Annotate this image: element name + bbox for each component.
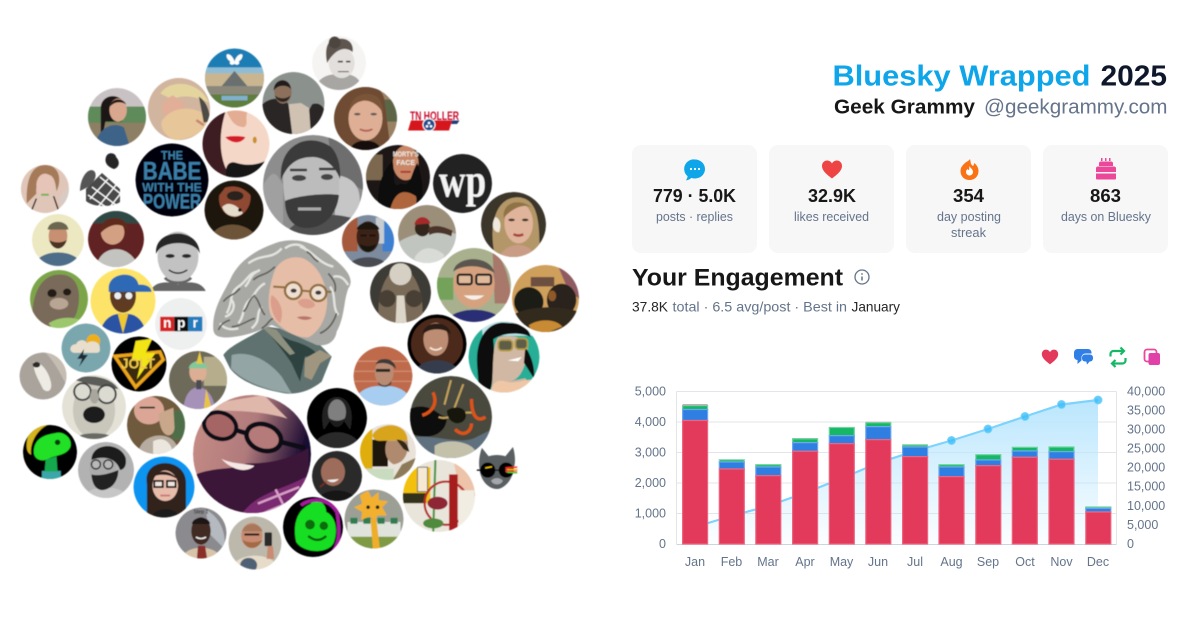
avatar: man in dark coat <box>262 72 324 134</box>
stat card: posts and replies <box>632 145 757 253</box>
month labels: Jan <box>685 555 705 569</box>
avatar: The Babe With The Power <box>136 144 208 216</box>
right axis labels: 0 <box>1127 537 1134 551</box>
bar: Feb <box>719 460 744 544</box>
avatar: Jolt diamond logo: JOLT <box>121 356 155 372</box>
avatar: NPR logo: p <box>177 316 185 331</box>
stat card: day posting streak: 354 <box>953 186 984 206</box>
portrait: watercolor main woman <box>213 240 351 394</box>
cumulative dots <box>911 396 1102 455</box>
avatar: cartoon man in blue cap on yellow <box>90 268 156 334</box>
month labels: Apr <box>795 555 815 569</box>
avatar: man in red cap <box>398 205 456 263</box>
avatar: bearded man in cap <box>32 214 84 266</box>
stat card: days on Bluesky: 863 <box>1090 186 1121 206</box>
avatar: owl <box>370 262 431 323</box>
bar: Dec <box>1086 507 1111 544</box>
avatar: man against brick wall <box>354 346 412 406</box>
user name and handle <box>834 96 1168 118</box>
legend icons <box>1042 348 1160 367</box>
right axis labels: 15,000 <box>1127 480 1165 494</box>
right axis labels: 30,000 <box>1127 422 1165 436</box>
avatar: woman with red lips <box>202 110 270 178</box>
icon: birthday cake <box>1096 158 1116 180</box>
avatar: Kronk cartoon with sunglasses <box>468 318 540 392</box>
user name and handle: @geekgrammy.com <box>984 96 1168 118</box>
heading: Your Engagement: Your Engagement <box>632 264 843 292</box>
left axis labels: 1,000 <box>635 506 666 520</box>
left axis labels <box>635 384 666 551</box>
logo: TN Holler: TN HOLLER <box>410 109 459 123</box>
avatar: Morty's Face woman: FACE <box>396 160 415 167</box>
stat card: likes received: likes received <box>794 210 869 224</box>
logo: TN Holler <box>408 109 460 131</box>
left axis labels: 3,000 <box>635 446 666 460</box>
avatar: sketched woman with updo <box>312 36 366 90</box>
avatar: woman in denim, landscape <box>88 88 146 146</box>
month labels: May <box>830 555 854 569</box>
avatar: large smiling man with glasses, purple tones <box>193 395 311 513</box>
avatar: NPR logo: n <box>163 316 171 331</box>
right axis labels: 35,000 <box>1127 404 1165 418</box>
avatar: man with cat <box>127 396 185 454</box>
stat card: posts and replies: posts · replies <box>656 210 733 224</box>
avatar: The Babe With The Power: THE <box>161 149 183 163</box>
avatar: screaming man sketch <box>62 375 126 439</box>
stat card: likes received: 32.9K <box>808 186 856 206</box>
chart: monthly engagement stacked bars and cumulative line <box>635 384 1165 569</box>
avatar: NPR logo: r <box>193 316 199 331</box>
right axis labels: 25,000 <box>1127 442 1165 456</box>
avatar: man taking mirror selfie <box>228 516 282 573</box>
month labels: Oct <box>1015 555 1035 569</box>
avatar: blonde woman with cat <box>148 78 210 140</box>
month labels: Feb <box>721 555 742 569</box>
legend: replies speech bubbles <box>1074 349 1093 364</box>
avatar: toddler <box>88 211 144 267</box>
month labels: Aug <box>940 555 963 569</box>
avatar: Morty's Face woman <box>366 145 430 209</box>
bar: Apr <box>793 438 818 544</box>
month labels: Jul <box>907 555 923 569</box>
left axis labels: 4,000 <box>635 415 666 429</box>
avatar: Morty's Face woman: MORTY'S <box>393 152 419 159</box>
left axis labels: 2,000 <box>635 476 666 490</box>
right axis labels <box>1127 384 1165 551</box>
stat card: posts and replies: 779 · 5.0K <box>653 186 736 206</box>
avatar: woman with green lips <box>21 165 69 213</box>
bar: Jan <box>683 404 708 544</box>
avatar: black and white man with long hair <box>307 388 367 448</box>
avatar: spiky yellow mascot over football team <box>344 490 404 548</box>
month labels: Mar <box>757 555 779 569</box>
month labels: Sep <box>977 555 999 569</box>
left axis labels: 5,000 <box>635 384 666 398</box>
avatar: smiling man in dark shirt <box>312 451 362 501</box>
legend: quotes copy squares <box>1144 350 1160 365</box>
avatar: man in yellow cap, profile <box>360 424 416 480</box>
avatar: blonde woman <box>481 192 546 257</box>
stat card: days on Bluesky <box>1043 145 1168 253</box>
avatar: large grayscale bearded man <box>263 135 363 235</box>
avatar: The Babe With The Power: BABE <box>143 158 201 185</box>
title: Bluesky Wrapped 2025: Bluesky Wrapped <box>832 60 1090 92</box>
avatar: abstract painting <box>403 460 475 532</box>
right axis labels: 5,000 <box>1127 518 1158 532</box>
illustration: birds on a checkered roof <box>80 153 122 207</box>
bar: Aug <box>939 465 964 544</box>
avatar: man in suit, Step 1 meme <box>176 508 226 558</box>
title: Bluesky Wrapped 2025: 2025 <box>1100 60 1167 92</box>
bar: Sep <box>976 455 1001 544</box>
cumulative line <box>695 400 1098 527</box>
avatar: The Babe With The Power: POWER <box>143 190 201 213</box>
avatar: red panda plush <box>204 180 264 240</box>
avatar: cartoon woman with glasses on blue <box>134 456 194 518</box>
avatar: woman in unicorn headband <box>169 351 227 409</box>
legend: likes heart <box>1042 350 1058 364</box>
icon: info <box>855 270 869 284</box>
avatar: man in suit, Step 1 meme: Step 1 <box>194 510 209 516</box>
engagement summary text: January <box>852 299 900 315</box>
bar: Oct <box>1012 447 1037 544</box>
stat card: day posting streak: day posting <box>937 210 1001 224</box>
icon: flame <box>960 159 978 180</box>
right axis labels: 20,000 <box>1127 460 1165 474</box>
avatar: bearded man in black and white <box>78 442 134 498</box>
bar: May <box>829 428 854 544</box>
avatar: Jolt diamond logo <box>112 336 166 392</box>
avatar: woman with brown hair <box>334 83 397 150</box>
user name and handle: Geek Grammy <box>834 96 976 118</box>
stacked bars <box>683 404 1111 544</box>
avatar: Japanese dragon print <box>410 376 492 458</box>
icon: chat bubble <box>684 159 705 180</box>
right axis labels: 40,000 <box>1127 384 1165 398</box>
left axis labels: 0 <box>659 537 666 551</box>
bar: Mar <box>756 465 781 544</box>
avatar: beaver illustration <box>30 270 88 328</box>
legend: reposts arrows <box>1110 348 1126 367</box>
avatar: Louvre with butterfly <box>205 48 264 108</box>
month labels: Dec <box>1087 555 1109 569</box>
bar: Nov <box>1049 447 1074 544</box>
engagement summary text <box>632 299 900 315</box>
avatar: two dogs <box>512 265 579 332</box>
avatar: storm cloud weather icon <box>62 324 110 372</box>
avatar bubble cluster <box>19 36 579 573</box>
avatar: man with dark border <box>408 314 466 374</box>
stat card: day posting streak <box>906 145 1031 253</box>
bar: Jun <box>866 422 891 544</box>
month labels: Jun <box>868 555 888 569</box>
stat card: day posting streak: streak <box>951 226 987 240</box>
bar: Jul <box>903 444 928 544</box>
engagement summary text: total · 6.5 avg/post · Best in <box>672 299 847 315</box>
month labels <box>685 555 1109 569</box>
avatar: green and purple creature <box>283 497 343 557</box>
avatar: NPR logo <box>155 298 207 350</box>
avatar: The Babe With The Power: WITH THE <box>142 181 202 195</box>
avatar: cat with rainbow sunglasses <box>477 447 517 489</box>
stat card: likes received <box>769 145 894 253</box>
avatar: Washington Post logo: wp <box>439 155 486 207</box>
icon: heart <box>822 160 842 178</box>
avatar: man selfie <box>342 215 394 267</box>
avatar: green dinosaur <box>23 425 77 479</box>
right axis labels: 10,000 <box>1127 499 1165 513</box>
stat card: days on Bluesky: days on Bluesky <box>1061 210 1152 224</box>
month labels: Nov <box>1050 555 1073 569</box>
avatar: cat peeking <box>19 352 66 400</box>
avatar: smiling man with glasses <box>437 248 511 322</box>
avatar: hedcut sketch man <box>150 232 206 291</box>
cumulative area <box>695 400 1098 544</box>
engagement summary text: 37.8K <box>632 299 669 315</box>
